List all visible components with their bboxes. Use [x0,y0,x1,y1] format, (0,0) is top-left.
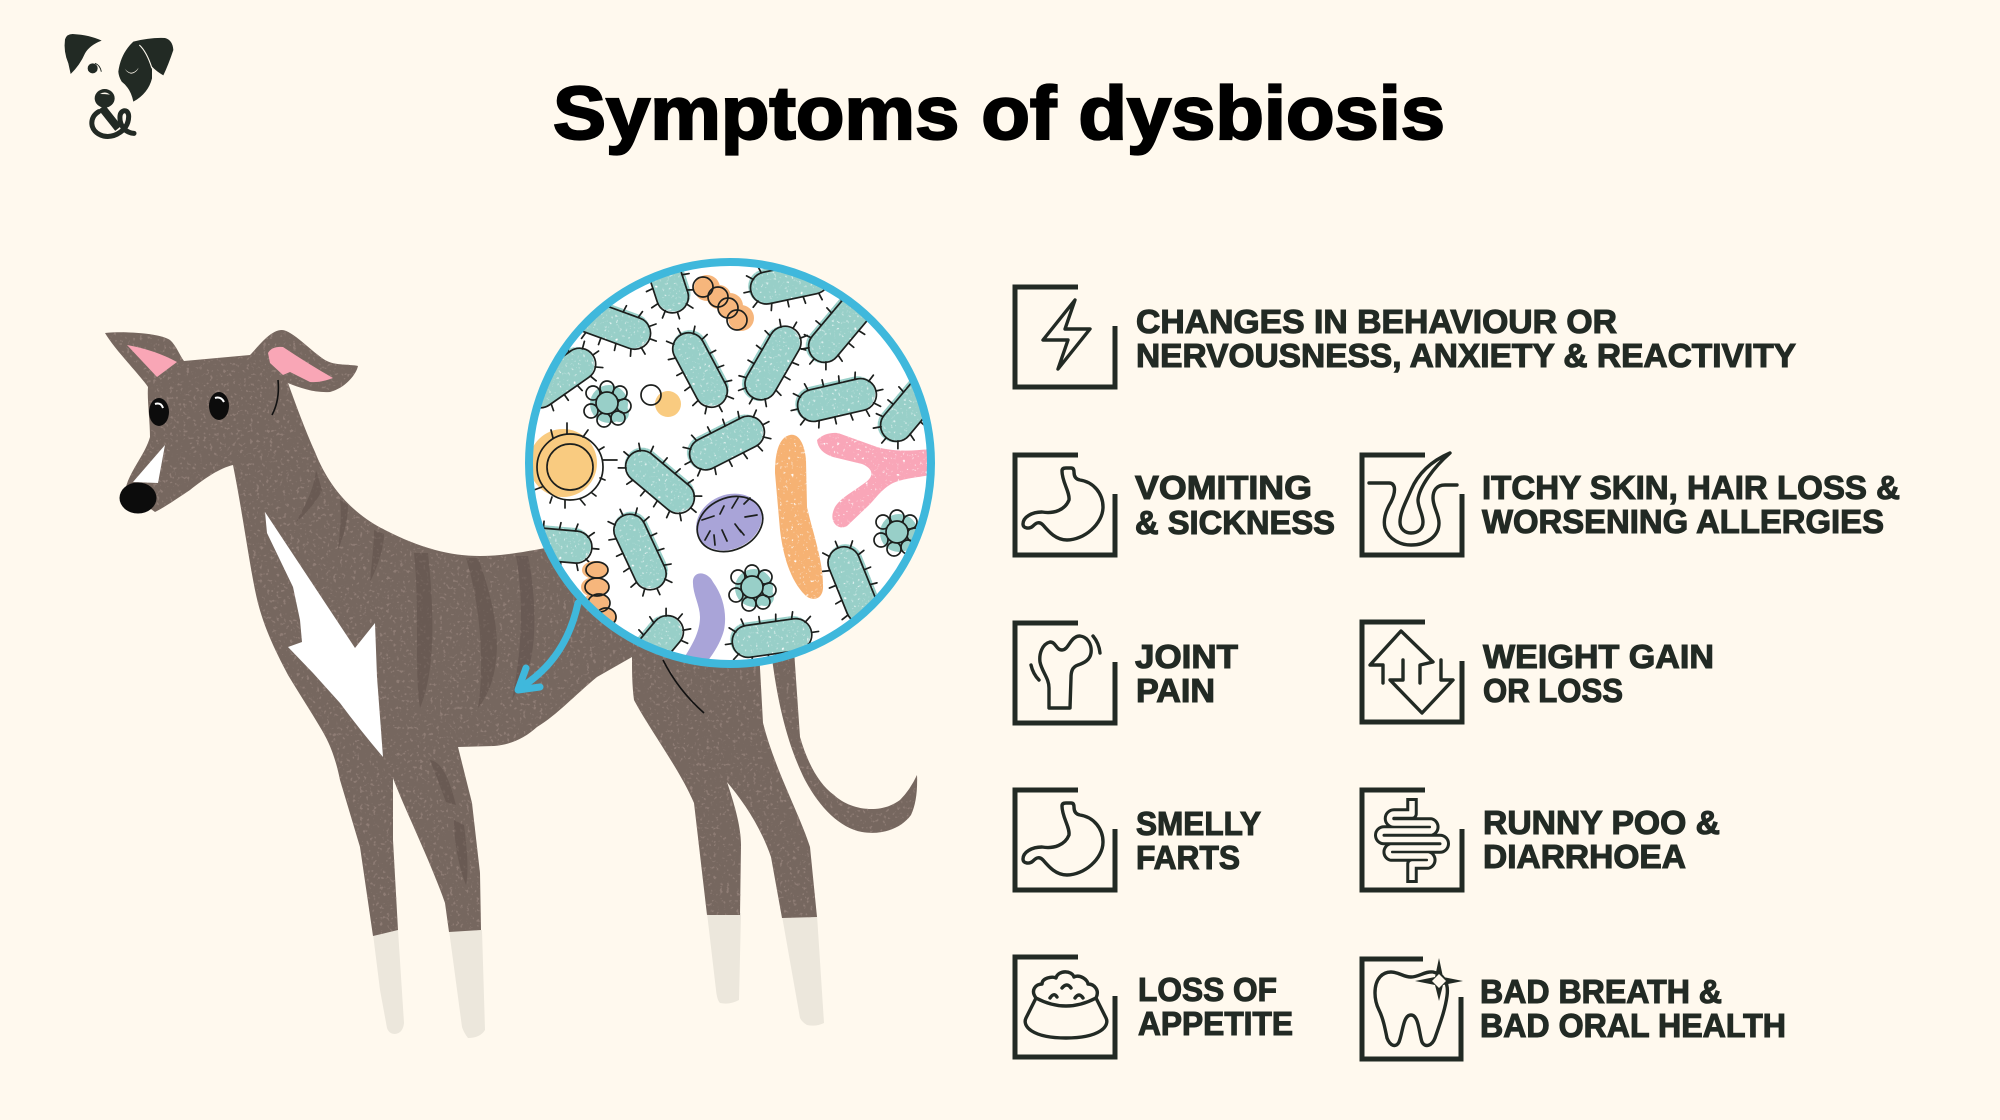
small cell and yellow blob [641,385,681,417]
text: runny poo [1483,804,1720,875]
dog ears inner pink [127,345,333,382]
text: behaviour: CHANGES IN BEHAVIOUR OR [1136,303,1617,340]
pink branching cell [817,433,930,527]
icon: food bowl [1015,957,1115,1057]
text: joint pain: PAIN [1136,672,1215,709]
text: weight: OR LOSS [1483,672,1623,709]
text: joint pain [1135,638,1238,709]
icon: up and down arrows [1362,622,1462,722]
icon: tooth with sparkle [1362,958,1463,1059]
dog body [105,330,817,936]
symptom: weight [1362,622,1714,722]
icon: lightning bolt [1015,287,1115,387]
text: vomiting: & SICKNESS [1135,504,1335,541]
text: joint pain: JOINT [1135,638,1238,675]
symptom: runny poo [1362,790,1720,890]
text: weight [1483,638,1714,709]
text: loss of appetite: LOSS OF [1138,971,1277,1008]
symptom: itchy skin [1362,453,1900,555]
text: weight: WEIGHT GAIN [1483,638,1714,675]
dog eyes [149,392,229,426]
text: bad breath: BAD ORAL HEALTH [1480,1007,1786,1044]
text: runny poo: DIARRHOEA [1483,838,1686,875]
symptom: joint pain [1015,623,1238,723]
text: itchy skin: ITCHY SKIN, HAIR LOSS & [1482,469,1900,506]
icon: hair follicle [1362,453,1462,555]
logo: dog face and ampersand [65,34,173,136]
text: smelly farts: SMELLY [1136,805,1261,842]
bacteria [540,268,924,660]
orange rod [775,435,823,599]
text: itchy skin [1482,469,1900,540]
lens ring [529,262,931,664]
cell clusters [584,381,921,611]
symptom list [1015,287,1900,1059]
yellow round cell [529,423,617,508]
dog paws [373,913,824,1038]
orange chains [581,275,754,627]
symptom: smelly farts [1015,790,1261,890]
symptom: loss of appetite [1015,957,1293,1057]
icon: stomach [1015,455,1115,555]
dog illustration [105,330,917,1038]
text: vomiting [1135,469,1335,541]
text: smelly farts [1136,805,1261,876]
icon: intestines [1362,790,1462,890]
icon: bone [1015,623,1115,723]
text: behaviour: NERVOUSNESS, ANXIETY & REACTIVITY [1136,337,1796,374]
icon: stomach [1015,790,1115,890]
text: smelly farts: FARTS [1136,839,1240,876]
symptom: bad breath [1362,958,1786,1059]
purple oval [696,494,764,552]
text: loss of appetite: APPETITE [1138,1005,1293,1042]
symptom: behaviour [1015,287,1796,387]
dog white chest marking [265,512,383,757]
symptom: vomiting [1015,455,1335,555]
arrow from lens to gut [518,603,578,690]
text: vomiting: VOMITING [1135,469,1312,506]
text: loss of appetite [1138,971,1293,1042]
dog line details [272,380,704,713]
dog tail [771,650,917,833]
title: Symptoms of dysbiosis [553,71,1445,155]
dog stripes [296,470,534,885]
text: itchy skin: WORSENING ALLERGIES [1482,503,1884,540]
text: bad breath: BAD BREATH & [1480,973,1722,1010]
text: bad breath [1480,973,1786,1044]
purple rod [684,573,725,662]
text: runny poo: RUNNY POO & [1483,804,1720,841]
dog nose and blaze [120,445,165,514]
magnifying lens with bacteria [525,258,935,668]
text: behaviour [1136,303,1796,374]
